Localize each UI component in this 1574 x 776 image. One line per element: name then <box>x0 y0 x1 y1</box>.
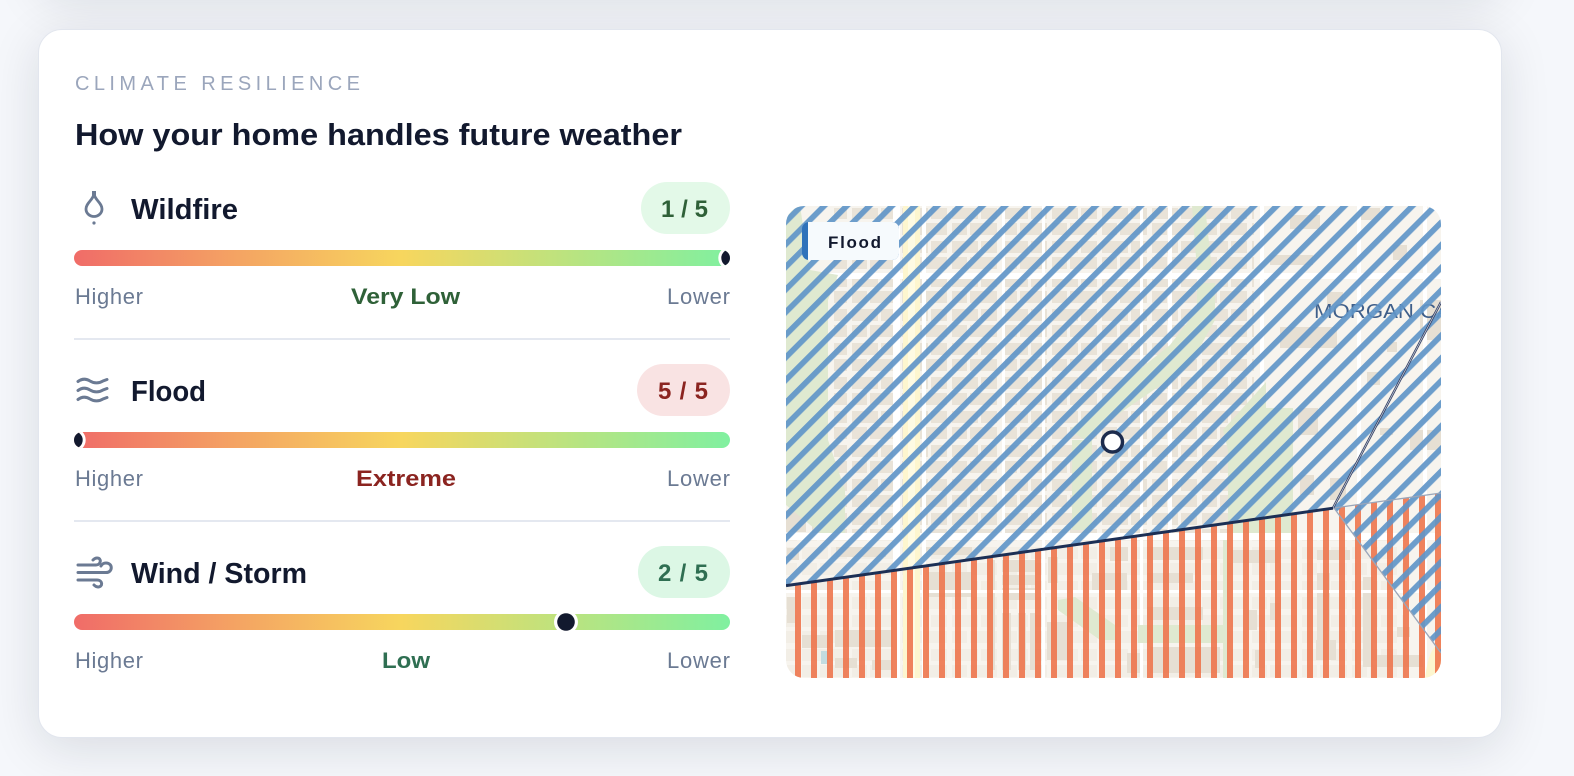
scale labels: Lower <box>667 284 730 309</box>
panel: wildfire rating <box>74 182 742 309</box>
scale labels <box>75 648 730 673</box>
map legend: flood <box>802 222 899 260</box>
property location pin <box>1102 432 1122 452</box>
scale labels: Extreme <box>356 466 456 491</box>
score pill: 1/5 <box>641 182 730 234</box>
panel: flood map <box>786 206 1452 678</box>
bar marker <box>554 610 578 634</box>
base map parks <box>786 206 1293 678</box>
heading: wind / storm: Wind / Storm <box>131 558 307 590</box>
map place label: MORGAN CA <box>1314 301 1452 323</box>
card content <box>74 76 1441 678</box>
icon: flood waves <box>78 379 107 401</box>
score pill: 2/5: 2 / 5 <box>658 560 708 587</box>
scale labels <box>75 466 730 491</box>
flood zone dark boundary <box>786 508 1333 586</box>
blue flood zone <box>786 206 1441 653</box>
scale labels: Low <box>382 648 431 673</box>
scale labels: Higher <box>75 648 143 673</box>
base map yellow road <box>903 206 1441 678</box>
base map buildings <box>786 208 1441 678</box>
scale labels: Higher <box>75 466 143 491</box>
heading: wildfire: Wildfire <box>131 194 238 226</box>
eyebrow label: CLIMATE RESILIENCE <box>75 73 360 95</box>
base map roads <box>786 206 1441 678</box>
orange hazard zone <box>786 493 1441 678</box>
flood zone thin boundary <box>1333 302 1441 653</box>
score pill: 5/5: 5 / 5 <box>658 378 708 405</box>
scale labels: Higher <box>75 284 143 309</box>
panel: wind and storm rating <box>74 546 730 673</box>
scale labels: Lower <box>667 466 730 491</box>
gradient bar with marker <box>74 250 730 266</box>
gradient bar with marker <box>74 432 730 448</box>
scale labels: Lower <box>667 648 730 673</box>
panel: flood rating <box>62 364 730 491</box>
scale labels <box>75 284 730 309</box>
gradient bar <box>74 614 730 630</box>
map legend: flood: Flood <box>828 233 881 252</box>
base map water <box>821 651 827 664</box>
scale labels: Very Low <box>351 284 461 309</box>
score pill: 1/5: 1 / 5 <box>661 196 708 223</box>
icon: wind <box>78 558 111 587</box>
score pill: 5/5 <box>637 364 730 416</box>
icon: wildfire droplet <box>86 191 102 225</box>
heading: flood: Flood <box>131 376 206 408</box>
score pill: 2/5 <box>638 546 730 598</box>
title: How your home handles future weather <box>75 117 682 152</box>
